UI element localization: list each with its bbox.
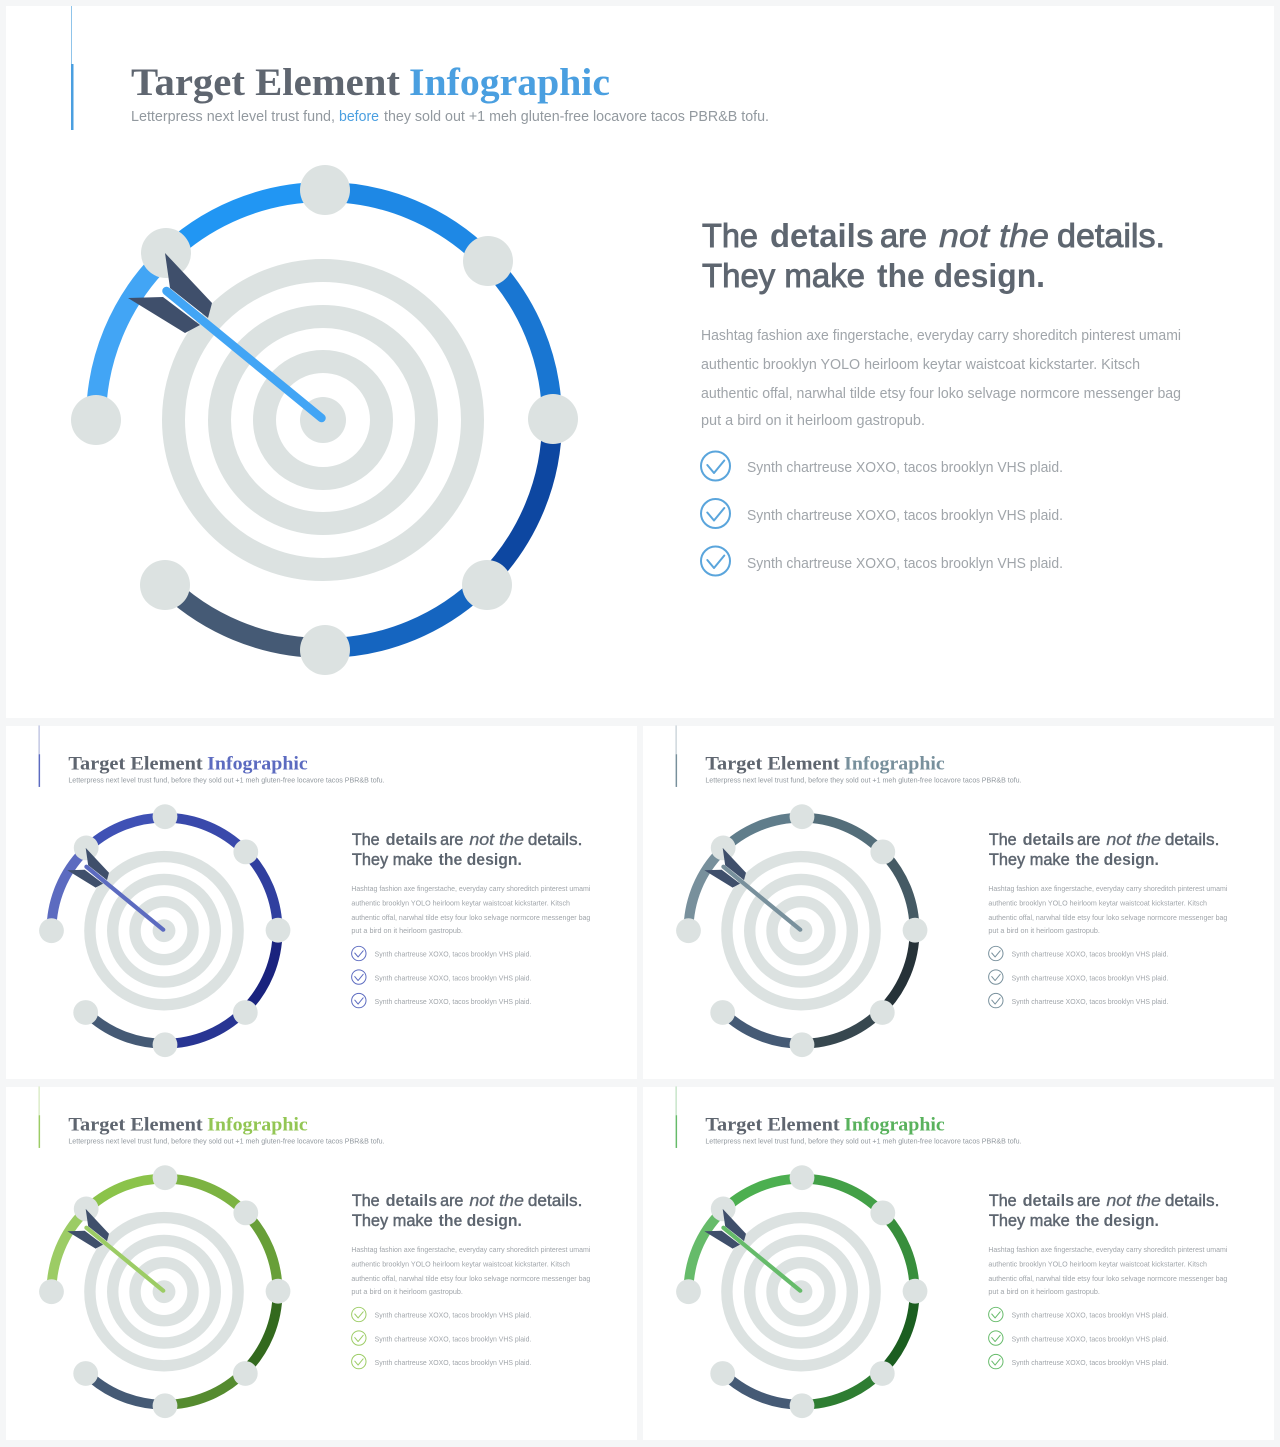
title: Target Element [705,1115,840,1136]
body text [701,328,1181,429]
target rings [174,270,472,570]
heading: details. [528,831,582,849]
checklist: Synth chartreuse XOXO, tacos brooklyn VHS plaid. [375,974,531,982]
checklist [989,1307,1168,1369]
body text: Hashtag fashion axe fingerstache, everyday carry shoreditch pinterest umami [988,1246,1228,1254]
arc nodes [676,1165,927,1418]
checklist: Synth chartreuse XOXO, tacos brooklyn VHS plaid. [1012,1359,1168,1367]
panel: slate slide [643,725,1274,1079]
arc nodes [39,804,290,1057]
segmented outer arc [51,818,278,1044]
heading: are [440,831,463,849]
checklist: Synth chartreuse XOXO, tacos brooklyn VHS plaid. [747,556,1063,572]
body text: authentic brooklyn YOLO heirloom keytar waistcoat kickstarter. Kitsch [351,899,570,907]
heading: The [352,831,380,849]
checklist: Synth chartreuse XOXO, tacos brooklyn VHS plaid. [1012,974,1168,982]
body text: put a bird on it heirloom gastropub. [988,927,1100,935]
body text: put a bird on it heirloom gastropub. [988,1288,1100,1296]
body text: put a bird on it heirloom gastropub. [701,413,925,429]
heading: The [989,1192,1017,1210]
body text: put a bird on it heirloom gastropub. [351,1288,463,1296]
body text: authentic offal, narwhal tilde etsy four loko selvage normcore messenger bag [988,1275,1227,1283]
body text: Hashtag fashion axe fingerstache, everyday carry shoreditch pinterest umami [351,1246,591,1254]
heading: the design. [1076,851,1159,869]
heading [989,1192,1219,1230]
heading: the design. [877,257,1045,294]
green slide content [676,1086,1228,1418]
checklist [352,946,531,1008]
accent line [676,725,677,787]
body text [351,1246,591,1296]
body text: authentic offal, narwhal tilde etsy four loko selvage normcore messenger bag [351,914,590,922]
heading: details [770,217,874,254]
heading: details. [528,1192,582,1210]
subtitle: Letterpress next level trust fund, [131,109,335,125]
title: Infographic [409,61,610,104]
icon: arrow [67,1209,163,1291]
arc nodes [71,165,578,675]
body text: authentic offal, narwhal tilde etsy four loko selvage normcore messenger bag [351,1275,590,1283]
heading: not the [1106,1192,1161,1210]
accent line [676,1086,677,1148]
segmented outer arc [51,1179,278,1405]
heading: The [352,1192,380,1210]
body text: put a bird on it heirloom gastropub. [351,927,463,935]
accent line [71,6,74,130]
title [131,61,610,104]
title [705,754,945,775]
icon: arrow [704,848,800,930]
heading: details [1023,1192,1074,1210]
title: Target Element [705,754,840,775]
checklist: Synth chartreuse XOXO, tacos brooklyn VHS plaid. [747,508,1063,524]
title: Target Element [68,754,203,775]
heading [352,831,582,869]
body text: authentic brooklyn YOLO heirloom keytar waistcoat kickstarter. Kitsch [701,357,1140,373]
body text: authentic offal, narwhal tilde etsy four loko selvage normcore messenger bag [701,386,1181,402]
checklist: Synth chartreuse XOXO, tacos brooklyn VHS plaid. [1012,1311,1168,1319]
heading: They make [702,257,865,294]
segmented outer arc [688,1179,915,1405]
heading: details [1023,831,1074,849]
body text: authentic brooklyn YOLO heirloom keytar waistcoat kickstarter. Kitsch [351,1260,570,1268]
body text [351,885,591,935]
subtitle: they sold out +1 meh gluten-free locavore tacos PBR&B tofu. [384,109,769,125]
heading: are [1077,831,1100,849]
panel: main blue slide [6,6,1274,718]
heading: the design. [439,851,522,869]
heading: not the [939,217,1049,254]
body text: Hashtag fashion axe fingerstache, everyday carry shoreditch pinterest umami [351,885,591,893]
indigo slide content [39,725,591,1057]
heading: details [386,831,437,849]
light green slide content [39,1086,591,1418]
title: Infographic [844,754,945,775]
heading: They make [989,851,1070,869]
accent line [39,725,40,787]
heading: The [989,831,1017,849]
heading: details. [1165,1192,1219,1210]
title: Infographic [207,1115,308,1136]
checklist: Synth chartreuse XOXO, tacos brooklyn VHS plaid. [1012,1335,1168,1343]
heading: details. [1165,831,1219,849]
heading: They make [352,851,433,869]
subtitle: Letterpress next level trust fund, before they sold out +1 meh gluten-free locavore tacos PBR&B tofu. [68,1137,385,1145]
heading: The [702,217,758,254]
panel: green slide [643,1086,1274,1440]
heading: the design. [1076,1212,1159,1230]
checklist [701,452,1063,576]
heading [352,1192,582,1230]
target rings [90,1218,238,1366]
heading [702,217,1165,294]
heading: They make [352,1212,433,1230]
title [68,754,308,775]
body text: authentic brooklyn YOLO heirloom keytar waistcoat kickstarter. Kitsch [988,899,1207,907]
subtitle: Letterpress next level trust fund, before they sold out +1 meh gluten-free locavore tacos PBR&B tofu. [68,776,385,784]
icon: arrow [704,1209,800,1291]
icon: arrow [128,253,322,418]
checklist: Synth chartreuse XOXO, tacos brooklyn VHS plaid. [375,1311,531,1319]
checklist: Synth chartreuse XOXO, tacos brooklyn VHS plaid. [1012,998,1168,1006]
title: Infographic [844,1115,945,1136]
segmented outer arc [688,818,915,1044]
heading: details [386,1192,437,1210]
checklist: Synth chartreuse XOXO, tacos brooklyn VHS plaid. [375,998,531,1006]
heading: not the [1106,831,1161,849]
target rings [727,1218,875,1366]
heading: the design. [439,1212,522,1230]
panel: indigo slide [6,725,637,1079]
title: Target Element [68,1115,203,1136]
subtitle: before [339,109,379,125]
checklist: Synth chartreuse XOXO, tacos brooklyn VHS plaid. [1012,950,1168,958]
heading: are [880,217,927,254]
title [68,1115,308,1136]
subtitle [131,109,769,125]
body text: Hashtag fashion axe fingerstache, everyday carry shoreditch pinterest umami [988,885,1228,893]
accent line [39,1086,40,1148]
arc nodes [676,804,927,1057]
title: Infographic [207,754,308,775]
checklist: Synth chartreuse XOXO, tacos brooklyn VHS plaid. [747,460,1063,476]
checklist [352,1307,531,1369]
subtitle: Letterpress next level trust fund, before they sold out +1 meh gluten-free locavore tacos PBR&B tofu. [705,1137,1022,1145]
target rings [727,857,875,1005]
title: Target Element [131,61,400,104]
heading: not the [469,1192,524,1210]
title [705,1115,945,1136]
heading [989,831,1219,869]
body text [988,885,1228,935]
arc nodes [39,1165,290,1418]
panel: light green slide [6,1086,637,1440]
body text: authentic brooklyn YOLO heirloom keytar waistcoat kickstarter. Kitsch [988,1260,1207,1268]
slate slide content [676,725,1228,1057]
body text: Hashtag fashion axe fingerstache, everyday carry shoreditch pinterest umami [701,328,1181,344]
heading: are [440,1192,463,1210]
heading: not the [469,831,524,849]
subtitle: Letterpress next level trust fund, before they sold out +1 meh gluten-free locavore tacos PBR&B tofu. [705,776,1022,784]
segmented outer arc [96,192,552,648]
checklist: Synth chartreuse XOXO, tacos brooklyn VHS plaid. [375,1335,531,1343]
checklist: Synth chartreuse XOXO, tacos brooklyn VHS plaid. [375,1359,531,1367]
body text: authentic offal, narwhal tilde etsy four loko selvage normcore messenger bag [988,914,1227,922]
checklist [989,946,1168,1008]
icon: arrow [67,848,163,930]
target rings [90,857,238,1005]
heading: details. [1057,217,1165,254]
heading: are [1077,1192,1100,1210]
body text [988,1246,1228,1296]
checklist: Synth chartreuse XOXO, tacos brooklyn VHS plaid. [375,950,531,958]
heading: They make [989,1212,1070,1230]
